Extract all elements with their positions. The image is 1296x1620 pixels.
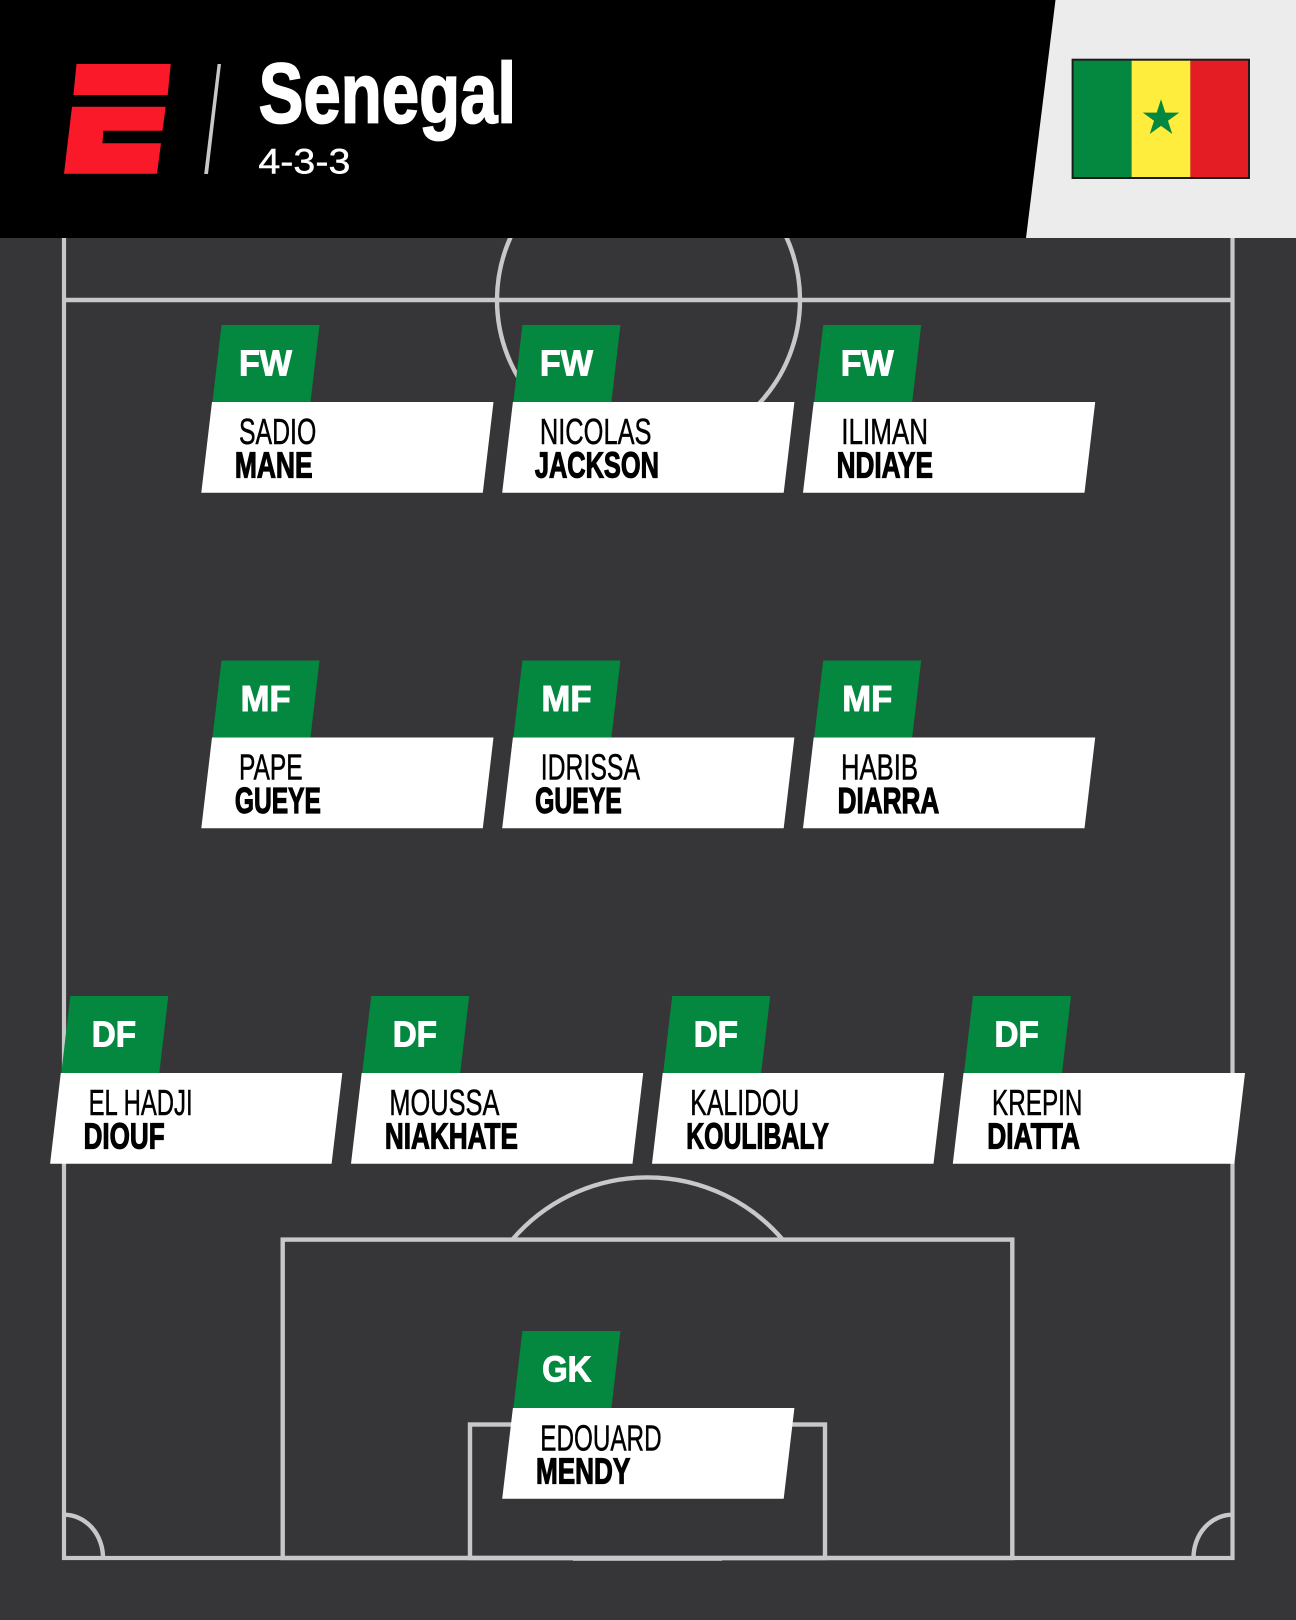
player: Iliman Ndiaye: [803, 325, 1095, 493]
position tag: DF: [61, 996, 168, 1073]
position tag: DF: DF: [393, 1013, 437, 1054]
header bar: [0, 0, 1296, 238]
name plate: [803, 738, 1095, 828]
position tag: DF: DF: [694, 1013, 738, 1054]
player: Habib Diarra: [803, 660, 1095, 828]
player: Nicolas Jackson: [502, 325, 794, 493]
name plate: KOULIBALY: [686, 1115, 829, 1156]
position tag: MF: [513, 660, 620, 738]
player: Edouard Mendy: [502, 1331, 794, 1499]
ESPN logo: [64, 64, 171, 174]
name plate: [351, 1073, 643, 1164]
name plate: GUEYE: [535, 780, 622, 821]
position tag: DF: [362, 996, 469, 1073]
position tag: DF: [964, 996, 1071, 1073]
name plate: [201, 738, 494, 828]
logo divider: [204, 64, 221, 174]
player: Idrissa Gueye: [502, 660, 794, 828]
name plate: NIAKHATE: [385, 1115, 518, 1156]
player: Krepin Diatta: [953, 996, 1245, 1164]
Senegal flag: [1072, 59, 1250, 179]
name plate: EDOUARD: [540, 1418, 662, 1459]
name plate: DIATTA: [987, 1115, 1080, 1156]
name plate: HABIB: [841, 747, 918, 788]
position tag: MF: MF: [842, 678, 892, 719]
player: Kalidou Koulibaly: [652, 996, 944, 1164]
player: Moussa Niakhate: [351, 996, 643, 1164]
name plate: PAPE: [239, 747, 303, 788]
name plate: MANE: [235, 444, 313, 485]
position tag: FW: [212, 325, 320, 402]
position tag: GK: GK: [542, 1348, 591, 1389]
formation: 4-3-3: [258, 142, 350, 182]
name plate: NDIAYE: [837, 444, 933, 485]
player: Sadio Mane: [201, 325, 494, 493]
position tag: FW: FW: [239, 342, 292, 383]
position tag: DF: [663, 996, 770, 1073]
name plate: KALIDOU: [690, 1082, 799, 1123]
name plate: DIOUF: [84, 1115, 165, 1156]
name plate: MOUSSA: [389, 1082, 500, 1123]
name plate: [953, 1073, 1245, 1164]
name plate: IDRISSA: [541, 747, 640, 788]
position tag: GK: [513, 1331, 620, 1408]
position tag: DF: DF: [995, 1013, 1039, 1054]
player: El Hadji Diouf: [50, 996, 342, 1164]
name plate: ILIMAN: [841, 411, 928, 452]
name plate: [502, 738, 794, 828]
name plate: EL HADJI: [89, 1082, 193, 1123]
position tag: MF: [814, 660, 921, 738]
position tag: DF: DF: [92, 1013, 136, 1054]
name plate: SADIO: [239, 411, 316, 452]
position tag: MF: MF: [241, 678, 291, 719]
pitch markings: [64, 148, 1232, 1561]
position tag: FW: [513, 325, 620, 402]
name plate: NICOLAS: [540, 411, 652, 452]
position tag: MF: [212, 660, 320, 738]
name plate: MENDY: [536, 1451, 630, 1492]
name plate: [50, 1073, 342, 1164]
position tag: FW: FW: [841, 342, 894, 383]
name plate: [803, 402, 1095, 493]
flag panel: [1026, 0, 1296, 238]
name plate: JACKSON: [535, 444, 659, 485]
position tag: MF: MF: [542, 678, 592, 719]
name plate: [502, 402, 794, 493]
player: Pape Gueye: [201, 660, 494, 828]
name plate: KREPIN: [992, 1082, 1083, 1123]
name plate: GUEYE: [235, 780, 321, 821]
position tag: FW: [814, 325, 921, 402]
name plate: [201, 402, 494, 493]
position tag: FW: FW: [540, 342, 593, 383]
name plate: DIARRA: [838, 780, 939, 821]
name plate: [502, 1408, 794, 1499]
team name: Senegal: [259, 47, 516, 142]
name plate: [652, 1073, 944, 1164]
